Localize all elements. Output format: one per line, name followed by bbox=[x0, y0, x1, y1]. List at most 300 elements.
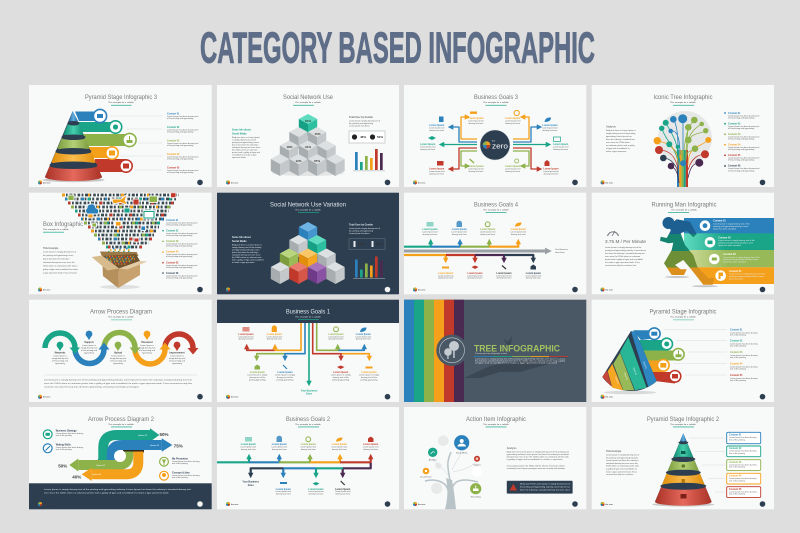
band contents bbox=[700, 220, 766, 281]
heading: This example for a subtitle bbox=[43, 228, 69, 231]
content list: Content 01 bbox=[167, 112, 180, 116]
heading: This example for a subtitle bbox=[295, 208, 322, 212]
content list: of the printing and typesetting bbox=[167, 158, 193, 160]
goal labels and icons: dummy text here bbox=[511, 233, 527, 236]
left items: text of the printing bbox=[56, 434, 72, 437]
goal labels and icons: Lorem Ipsum bbox=[496, 272, 512, 275]
goal labels and icons: Lorem Ipsum text bbox=[505, 120, 521, 123]
warning callout bbox=[507, 481, 573, 494]
panel: Iconic Tree Infographic bbox=[592, 85, 774, 188]
goal labels and icons: Lorem Ipsum bbox=[335, 488, 350, 491]
info text: and typesetting industry Lorem bbox=[232, 248, 260, 252]
heading: Pyramid Stage Infographic bbox=[650, 310, 716, 316]
analysis text: containing Lorem Ipsum passages and more recently with desktop bbox=[507, 467, 566, 470]
goal labels and icons: Lorem Ipsum bbox=[438, 272, 453, 275]
goal labels and icons: dummy text here bbox=[544, 173, 559, 176]
topic nodes: Networking bbox=[471, 496, 481, 498]
goal labels and icons: dummy text here bbox=[272, 448, 288, 451]
heading bbox=[283, 95, 334, 106]
analysis text: simply dummy text of the printing bbox=[606, 132, 635, 135]
step labels: Upload bbox=[114, 352, 123, 355]
cube pyramid: 15% bbox=[314, 132, 321, 136]
goal labels and icons: Lorem Ipsum text bbox=[543, 170, 559, 173]
title example text: the printing and typesetting Lorem bbox=[43, 254, 74, 257]
bar chart bbox=[353, 149, 385, 171]
logo bbox=[600, 502, 614, 506]
goal labels and icons: Lorem Ipsum text bbox=[480, 231, 496, 234]
logo bbox=[226, 288, 239, 292]
warning callout: Make your Point Lorem Ipsum is simply dummy text of bbox=[520, 482, 570, 486]
step labels: Lorem Ipsum is bbox=[82, 345, 96, 347]
goal labels and icons: printing typesetting bbox=[277, 378, 293, 381]
content list bbox=[724, 112, 760, 172]
goal labels and icons: Lorem Ipsum bbox=[452, 228, 467, 231]
right items: Lorem Ipsum has been dummy bbox=[172, 461, 200, 463]
stage icons bbox=[93, 109, 136, 172]
header band: This example for a subtitle bbox=[295, 316, 322, 319]
goal labels and icons: Lorem Ipsum text bbox=[241, 446, 256, 448]
content list: Content 06 bbox=[166, 272, 179, 275]
panel: Business Goals 2 bbox=[217, 407, 399, 509]
content list: Content 01 bbox=[166, 219, 179, 222]
panel: Running Man Infographic bbox=[592, 193, 774, 294]
content list: of the printing and typesetting bbox=[728, 148, 754, 151]
percent labels: 50% bbox=[58, 463, 67, 468]
step labels: of the printing and bbox=[110, 360, 126, 362]
content boxes: Lorem Ipsum has been dummy bbox=[729, 437, 757, 439]
logo: the zero bbox=[606, 181, 614, 184]
logo: the zero bbox=[606, 503, 614, 506]
content list: Lorem Ipsum has been dummy bbox=[730, 355, 758, 357]
goal labels and icons: Lorem Ipsum text bbox=[496, 274, 512, 277]
heading: This example for a subtitle bbox=[670, 316, 697, 319]
content list: Content 04 bbox=[728, 144, 741, 146]
step labels: typesetting bbox=[55, 362, 65, 365]
logo: the zero bbox=[43, 503, 51, 506]
heading bbox=[652, 202, 716, 213]
gender split box: 52% bbox=[376, 242, 382, 246]
logo bbox=[38, 502, 51, 506]
content list: Lorem Ipsum has been dummy text bbox=[166, 274, 198, 277]
content boxes: Lorem Ipsum has been dummy bbox=[729, 491, 757, 493]
topic nodes bbox=[420, 435, 481, 498]
cover subtitle: Premium your tree infographic content bbox=[475, 352, 508, 355]
heading: This example for a subtitle bbox=[670, 423, 697, 426]
info text: standard dummy text ever since bbox=[232, 146, 261, 149]
cone pyramid bbox=[42, 111, 104, 182]
content list: Lorem Ipsum has been dummy text bbox=[167, 142, 199, 145]
info text: Body text here as Lorem Ipsum bbox=[232, 136, 260, 139]
goal labels and icons: Your Business bbox=[555, 249, 568, 251]
logo: the zero bbox=[43, 181, 51, 184]
heading: This example for a subtitle bbox=[670, 101, 697, 104]
goal labels and icons: Lorem Ipsum text bbox=[468, 120, 484, 123]
content list: Lorem Ipsum has been dummy text bbox=[728, 125, 760, 128]
cover text: of type and scrambled it to make a type specimen book survived bbox=[475, 362, 557, 364]
heading: This example for a subtitle bbox=[108, 316, 135, 319]
goal labels and icons: Lorem Ipsum bbox=[276, 488, 291, 491]
goal labels and icons: Lorem Ipsum is simply bbox=[275, 375, 295, 377]
header band: Business Goals 1 bbox=[286, 310, 331, 316]
panel: Arrow Process Diagram bbox=[29, 300, 212, 402]
panel: Action Item Infographic bbox=[404, 407, 586, 509]
step labels: Lorem Ipsum is bbox=[170, 356, 184, 358]
heading bbox=[474, 95, 519, 106]
interlocking arrows: Option 03 bbox=[150, 444, 160, 447]
title example text: 1500s when an unknown printer took bbox=[606, 465, 639, 468]
goal labels and icons: printing typesetting bbox=[332, 378, 349, 381]
content list: Content 04 bbox=[167, 153, 180, 156]
step labels: simply dummy text bbox=[110, 357, 127, 360]
cube pyramid: 12% bbox=[295, 159, 302, 163]
step labels: Password bbox=[141, 341, 153, 344]
goal labels and icons: Lorem Ipsum bbox=[238, 333, 254, 336]
content list: Content 05 bbox=[730, 374, 743, 377]
content boxes bbox=[727, 432, 761, 497]
panel: Pyramid Stage Infographic 3 bbox=[29, 85, 212, 187]
heading bbox=[43, 222, 83, 233]
stat and text: Lorem Ipsum is simply dummy text of the bbox=[605, 246, 642, 249]
goal labels and icons: Lorem Ipsum text bbox=[238, 335, 254, 338]
goal labels and icons bbox=[422, 221, 568, 280]
analysis text: an unknown printer took a galley bbox=[606, 144, 635, 147]
step labels: simply dummy text bbox=[139, 346, 156, 350]
goal labels and icons: Lorem Ipsum bbox=[543, 168, 559, 171]
goal labels and icons: Lorem Ipsum text bbox=[328, 335, 344, 338]
panel: Box Infographic bbox=[29, 193, 212, 294]
goal labels and icons: Lorem Ipsum text bbox=[308, 490, 324, 493]
dark footer bbox=[29, 483, 212, 509]
goal labels and icons: dummy text here bbox=[429, 129, 445, 132]
content list: Content 04 bbox=[166, 251, 179, 254]
logo: the zero bbox=[418, 503, 426, 506]
goal labels and icons: Lorem Ipsum is simply bbox=[359, 375, 379, 377]
goal labels and icons: dummy text here bbox=[468, 277, 483, 280]
content list: Lorem Ipsum has been dummy text bbox=[167, 156, 199, 158]
gender split box: 52% bbox=[377, 135, 383, 139]
logo: the zero bbox=[606, 288, 614, 292]
gender text bbox=[349, 224, 380, 235]
panel: Pyramid Stage Infographic 2 bbox=[592, 407, 774, 509]
gender split box bbox=[349, 238, 385, 250]
heading: Social Network Use bbox=[283, 95, 334, 101]
band contents: Lorem Ipsum is simply dummy text of the bbox=[713, 222, 751, 226]
goal labels and icons: dummy text here bbox=[241, 448, 257, 451]
gender split box bbox=[349, 131, 385, 143]
goal labels and icons: Lorem Ipsum bbox=[542, 124, 558, 127]
analysis text: It was popularised in the 1960s with the release of Letraset sheets bbox=[507, 464, 565, 467]
content list bbox=[167, 112, 199, 174]
step labels: Lorem Ipsum is bbox=[140, 345, 154, 347]
step labels: of the printing and bbox=[52, 360, 68, 362]
content list: Content 05 bbox=[167, 166, 180, 170]
page badge bbox=[197, 394, 203, 400]
logo bbox=[600, 288, 614, 292]
content list: Lorem Ipsum has been dummy text bbox=[166, 253, 198, 256]
heading: Box Infographic bbox=[43, 222, 83, 228]
goal labels and icons bbox=[420, 110, 569, 176]
title example text: Title Example bbox=[606, 450, 622, 453]
goal labels and icons: Your Business bbox=[301, 390, 318, 392]
page badge bbox=[385, 394, 390, 400]
cube pyramid: 31% bbox=[305, 145, 311, 149]
cover text bbox=[475, 358, 565, 364]
running man bbox=[660, 217, 714, 285]
goal labels and icons: Lorem Ipsum bbox=[277, 371, 293, 374]
content list: Content 03 bbox=[167, 140, 180, 142]
band contents: Ipsum has been standard bbox=[718, 244, 741, 247]
step labels: Support bbox=[84, 341, 94, 344]
arc arrows bbox=[45, 333, 198, 364]
content list: of the printing and typesetting bbox=[728, 169, 754, 172]
cube pyramid: 18% bbox=[286, 145, 293, 149]
ground shadows bbox=[665, 276, 718, 287]
tilted cone: Point 02 bbox=[632, 367, 638, 376]
logo bbox=[226, 395, 239, 399]
heading bbox=[90, 310, 152, 320]
title example text bbox=[606, 450, 639, 476]
header band bbox=[217, 300, 399, 323]
page badge bbox=[197, 180, 203, 185]
interlocking arrows bbox=[69, 428, 172, 481]
step labels bbox=[52, 341, 186, 365]
goal labels and icons: Lorem Ipsum bbox=[328, 333, 344, 336]
stat and text: ever since the 1500s when an unknown bbox=[605, 255, 640, 258]
page badge bbox=[197, 501, 203, 507]
content list: Lorem Ipsum has been dummy bbox=[730, 332, 758, 334]
heading bbox=[650, 310, 716, 320]
percent labels: 50% bbox=[159, 432, 169, 437]
logo: the zero bbox=[418, 288, 426, 292]
content list: Lorem Ipsum has been dummy text bbox=[728, 136, 760, 138]
content list: of the printing and typesetting bbox=[167, 171, 193, 174]
analysis text: typesetting Lorem Ipsum has bbox=[606, 135, 632, 138]
content list: Content 02 bbox=[167, 126, 180, 129]
step labels: simply dummy text bbox=[169, 357, 186, 360]
connector lines bbox=[689, 438, 725, 492]
goal labels and icons: dummy text here bbox=[332, 448, 348, 451]
content list: Content 05 bbox=[728, 154, 741, 157]
goal labels and icons: dummy text here bbox=[469, 170, 484, 173]
right items: My Promotion bbox=[172, 457, 188, 460]
info text: to make a type specimen. bbox=[232, 261, 255, 264]
gender text: Total User by Gender bbox=[349, 224, 373, 226]
info text: Some Info about bbox=[232, 236, 251, 239]
goal labels and icons: Lorem Ipsum bbox=[505, 165, 520, 168]
gender text: Lorem Ipsum simply dummy text of bbox=[349, 120, 380, 122]
analysis text: Analysis bbox=[606, 126, 617, 128]
interlocking arrows: Option 02 bbox=[96, 464, 106, 467]
goal labels and icons bbox=[238, 325, 379, 396]
heading bbox=[88, 417, 155, 427]
logo bbox=[38, 395, 51, 399]
goal labels and icons: Lorem Ipsum text bbox=[420, 146, 436, 149]
coloured cube pyramid bbox=[271, 222, 345, 284]
logo bbox=[600, 180, 614, 184]
goal labels and icons: dummy text of the bbox=[249, 376, 266, 379]
goal labels and icons: Lorem Ipsum text bbox=[468, 168, 484, 171]
band contents: Content 02 bbox=[718, 236, 731, 239]
heading: Social Network Use Variation bbox=[270, 202, 346, 208]
panel: Pyramid Stage Infographic bbox=[592, 300, 774, 402]
heading: This example for a subtitle bbox=[295, 423, 322, 426]
step labels: typesetting bbox=[84, 352, 94, 354]
content list: Content 04 bbox=[730, 362, 743, 366]
title example text: Lorem Ipsum has been the industry's bbox=[606, 459, 639, 462]
goal labels and icons: Lorem Ipsum bbox=[267, 333, 282, 336]
analysis text: a galley of type and scrambled it to make a specimen bbox=[507, 458, 563, 461]
content list: of the printing and typesetting bbox=[728, 138, 754, 141]
content list: of the printing and typesetting bbox=[166, 255, 192, 258]
logo: the zero bbox=[231, 288, 239, 292]
title example text: a type specimen book. It has survived bbox=[43, 272, 76, 274]
right items: text of the printing bbox=[172, 462, 188, 465]
goal labels and icons: Lorem Ipsum text bbox=[363, 446, 379, 448]
content list: of the printing and typesetting bbox=[167, 144, 193, 147]
content boxes: Content 04 bbox=[729, 474, 742, 478]
logo: the zero bbox=[231, 396, 239, 399]
band contents: Content 01 bbox=[713, 220, 726, 223]
tilted cone: Point 04 bbox=[614, 376, 620, 385]
cube pyramid: 61% bbox=[305, 119, 311, 123]
panel: Business Goals 1 bbox=[217, 300, 399, 402]
goal labels and icons: dummy text here bbox=[452, 233, 468, 236]
title example text: 1500s when an unknown printer took a bbox=[43, 264, 78, 268]
left items bbox=[43, 430, 83, 453]
interlocking arrows: Option 04 bbox=[92, 473, 102, 476]
page badge bbox=[760, 180, 765, 185]
analysis text: typesetting industry Lorem Ipsum has been the industry's standard bbox=[507, 453, 569, 456]
page badge bbox=[385, 501, 390, 507]
goal labels and icons: dummy text here bbox=[420, 148, 436, 151]
content list: Content 05 bbox=[166, 261, 179, 264]
content list: Lorem Ipsum has been dummy text bbox=[728, 146, 760, 149]
band contents: Lorem Ipsum is simply dummy text of the bbox=[718, 239, 756, 242]
content list: Content 02 bbox=[730, 340, 743, 343]
content list: Lorem Ipsum has been dummy text bbox=[166, 242, 198, 246]
goal labels and icons: Lorem Ipsum bbox=[511, 228, 526, 231]
content list: text of the printing bbox=[730, 368, 746, 370]
content boxes: Lorem Ipsum has been dummy bbox=[729, 478, 757, 480]
heading bbox=[466, 417, 526, 427]
step labels: Networks bbox=[55, 352, 66, 355]
gender text: Lorem Ipsum has been bbox=[349, 233, 369, 235]
timeline arrows bbox=[217, 456, 371, 476]
right items: Concept & Idea bbox=[172, 471, 190, 474]
goal labels and icons: Lorem Ipsum text bbox=[505, 168, 521, 171]
info text: is simply dummy text of the bbox=[232, 138, 257, 142]
content boxes: text of the printing bbox=[729, 438, 745, 442]
footer text: Lorem Ipsum is simply dummy text of the printing and typesetting industry. Lorem Ipsum has been the industry's standard dummy text ever bbox=[44, 378, 192, 382]
content boxes: Content 02 bbox=[729, 447, 742, 450]
goal labels and icons: Lorem Ipsum bbox=[553, 143, 568, 146]
content list: Lorem Ipsum has been dummy text bbox=[167, 128, 199, 132]
goal labels and icons: dummy text here bbox=[553, 148, 569, 151]
goal labels and icons: Lorem Ipsum bbox=[422, 228, 438, 231]
title example text: Ipsum has been the industry's bbox=[43, 258, 70, 260]
goal labels and icons: Lorem Ipsum bbox=[429, 168, 444, 171]
goal labels and icons: Lorem Ipsum text bbox=[332, 446, 347, 448]
goal labels and icons: Lorem Ipsum bbox=[308, 488, 324, 491]
info text: Ipsum has been the industry's bbox=[232, 251, 259, 254]
percent labels bbox=[58, 432, 183, 480]
topic nodes: Support bbox=[473, 464, 481, 466]
content list: text of the printing bbox=[730, 356, 746, 359]
panel: Business Goals 4 bbox=[404, 193, 586, 294]
colour stripes bbox=[404, 300, 464, 402]
goal labels and icons: Lorem Ipsum text bbox=[542, 127, 558, 130]
right items: Lorem Ipsum has been dummy bbox=[172, 475, 200, 477]
gender text: Lorem Ipsum has been bbox=[349, 126, 369, 128]
content list: text of the printing bbox=[730, 334, 746, 336]
goal labels and icons: dummy text here bbox=[335, 492, 351, 496]
goal labels and icons: dummy text of the bbox=[277, 376, 294, 379]
tree bbox=[425, 435, 482, 509]
heading bbox=[286, 417, 331, 427]
logo bbox=[38, 180, 51, 184]
goal labels and icons: dummy text here bbox=[469, 122, 484, 125]
left items: Business Strategy bbox=[56, 430, 77, 432]
heading bbox=[647, 417, 720, 427]
content list: of the printing and typesetting bbox=[167, 117, 193, 120]
stat and text: printer took a galley of type and scrambled bbox=[605, 258, 643, 261]
analysis text: make a type specimen. bbox=[606, 150, 627, 153]
step labels: of the printing and bbox=[169, 360, 185, 362]
page badge bbox=[760, 394, 765, 400]
goal labels and icons: Lorem Ipsum is simply bbox=[247, 375, 267, 377]
title example text: survived not only five centuries bbox=[606, 473, 633, 476]
logo bbox=[226, 180, 239, 184]
analysis text bbox=[606, 126, 636, 153]
content list: Lorem Ipsum has been dummy text bbox=[728, 156, 760, 160]
panel: Business Goals 3 bbox=[404, 85, 586, 187]
content list: Lorem Ipsum has been dummy bbox=[730, 378, 758, 380]
goal labels and icons: dummy text here bbox=[301, 448, 317, 451]
page badge bbox=[197, 287, 203, 292]
goal labels and icons: dummy text of the bbox=[361, 376, 378, 379]
logo bbox=[600, 395, 614, 399]
goal labels and icons: dummy text here bbox=[429, 173, 445, 176]
stat and text bbox=[605, 239, 647, 267]
heading: Business Goals 4 bbox=[474, 202, 519, 208]
goal labels and icons: Goes Here bbox=[555, 252, 566, 254]
topic nodes: E-commerce bbox=[420, 476, 433, 478]
logo bbox=[38, 288, 51, 292]
content list: Lorem Ipsum has been dummy text bbox=[728, 114, 760, 118]
content list: of the printing and typesetting bbox=[166, 266, 192, 269]
content boxes: text of the printing bbox=[729, 479, 745, 482]
bird bbox=[503, 336, 512, 345]
goal labels and icons: Lorem Ipsum text bbox=[526, 274, 541, 277]
interlocking arrows: Option 01 bbox=[138, 434, 148, 437]
goal labels and icons: Lorem Ipsum bbox=[526, 272, 541, 275]
goal labels and icons: Goes bbox=[248, 484, 254, 487]
analysis text: ever since the 1500s when bbox=[606, 141, 630, 144]
logo bbox=[413, 288, 426, 292]
stage icons bbox=[648, 328, 684, 382]
info text: Body text here as Lorem Ipsum is bbox=[232, 244, 262, 246]
heading: This example for a subtitle bbox=[483, 208, 510, 212]
ribbons bbox=[633, 330, 678, 384]
page badge bbox=[572, 501, 578, 507]
title example text: standard dummy text ever since the bbox=[43, 261, 76, 264]
heading bbox=[270, 202, 346, 213]
analysis text: been the industry's standard text bbox=[606, 138, 635, 141]
step labels: Lorem Ipsum is bbox=[111, 356, 125, 358]
left items: Writing Skills bbox=[56, 443, 71, 446]
content list: Lorem Ipsum has been dummy text bbox=[166, 222, 198, 224]
percent labels: 75% bbox=[174, 444, 183, 449]
